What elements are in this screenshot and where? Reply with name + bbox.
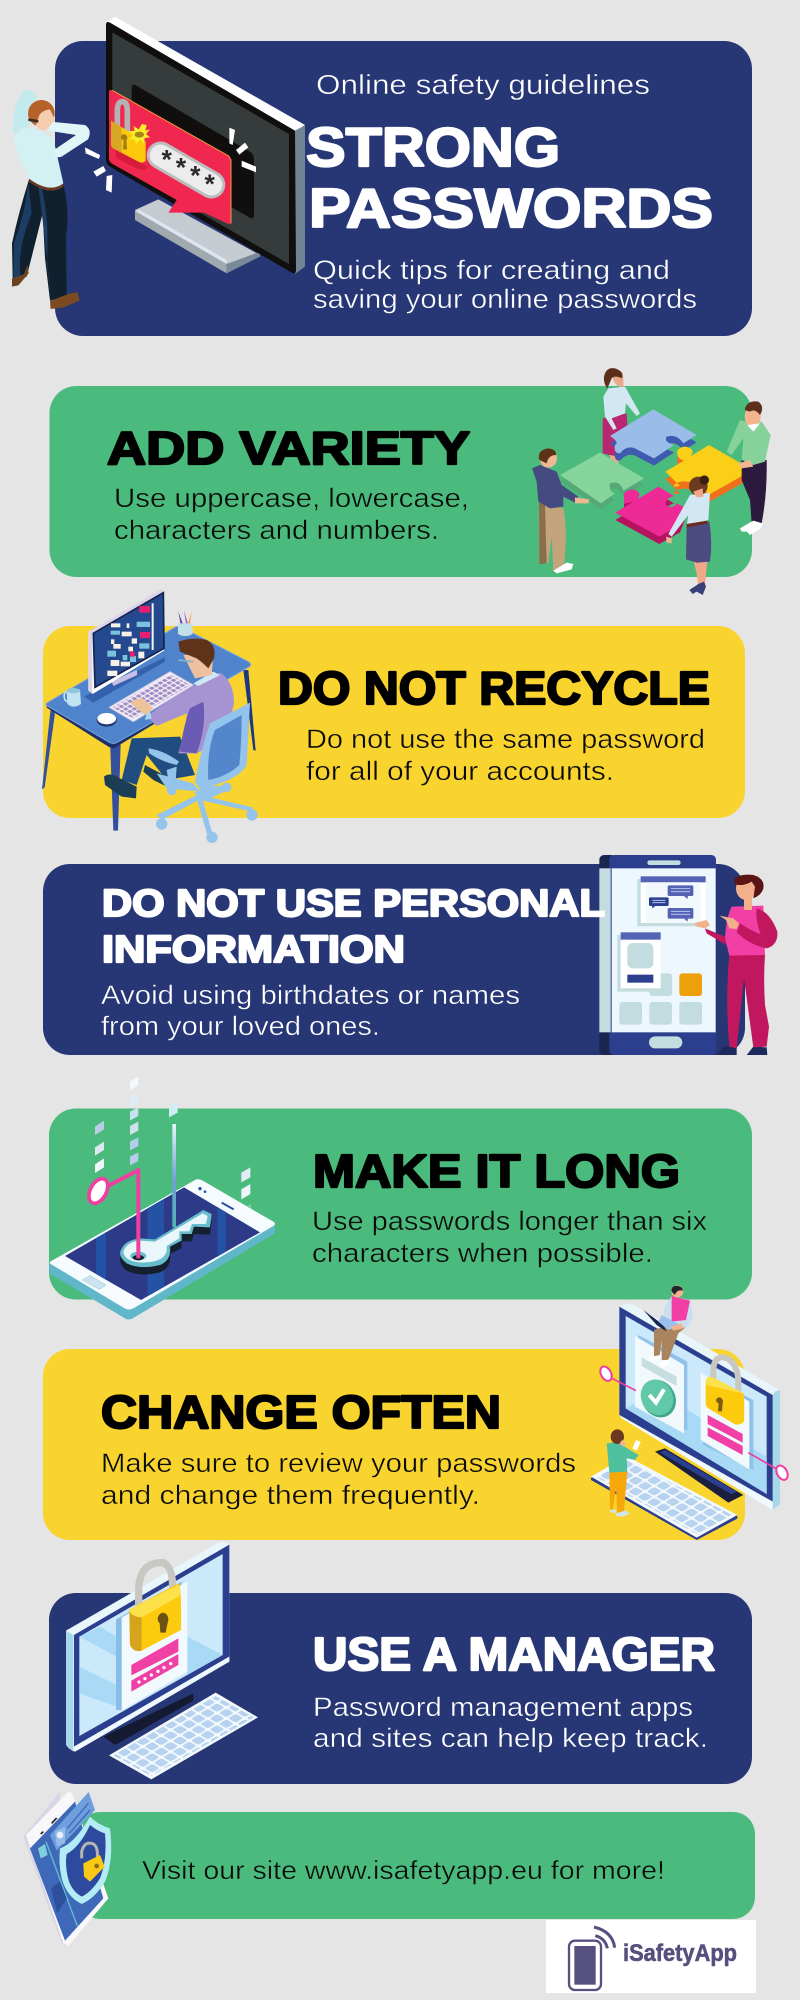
panel: make it long bbox=[49, 1077, 752, 1319]
panel background bbox=[78, 1812, 755, 1919]
icon: phone with signal bbox=[569, 1927, 615, 1990]
icon: floating data squares bbox=[95, 1077, 250, 1220]
icon: red password alert bbox=[109, 90, 231, 224]
heading: MAKE IT LONG bbox=[313, 1145, 680, 1197]
icon: smartphone bbox=[49, 1170, 275, 1319]
illustration: man at desk bbox=[42, 589, 258, 843]
panel: change often bbox=[43, 1285, 790, 1540]
panel: do not recycle bbox=[42, 589, 745, 843]
icon: standing man bbox=[607, 1429, 641, 1517]
icon: presenter bbox=[694, 875, 777, 1055]
hero background bbox=[55, 41, 752, 336]
icon: app window bbox=[617, 932, 661, 992]
panel background bbox=[43, 1349, 745, 1540]
icon: office chair bbox=[148, 703, 258, 843]
icon: profile card bbox=[50, 1792, 95, 1851]
heading: INFORMATION bbox=[102, 929, 405, 971]
icon: woman bottom bbox=[666, 475, 711, 595]
icon: impact marks bbox=[85, 128, 256, 193]
icon: red password alert: * bbox=[204, 169, 215, 199]
icon: pink key ring line bbox=[85, 1170, 138, 1258]
panel: do not use personal information bbox=[43, 855, 777, 1055]
title: STRONG bbox=[306, 116, 560, 178]
panel background bbox=[50, 386, 752, 577]
title bbox=[306, 116, 713, 239]
icon: mug bbox=[64, 688, 81, 707]
heading: CHANGE OFTEN bbox=[101, 1386, 501, 1438]
logo: iSafetyApp bbox=[546, 1920, 756, 1993]
body text: Make sure to review your passwords bbox=[101, 1448, 576, 1478]
heading: DO NOT RECYCLE bbox=[278, 662, 710, 714]
body text: and sites can help keep track. bbox=[313, 1723, 708, 1753]
icon: man right bbox=[727, 401, 771, 535]
icon: large monitor bbox=[619, 1304, 780, 1510]
panel background bbox=[43, 864, 745, 1055]
icon: key bbox=[120, 1210, 212, 1274]
icon: chat window bbox=[637, 876, 706, 926]
illustration: key on phone bbox=[49, 1077, 275, 1319]
subtitle: Quick tips for creating and bbox=[313, 255, 670, 285]
body text: characters when possible. bbox=[312, 1238, 653, 1268]
body text: Avoid using birthdates or names bbox=[101, 980, 520, 1010]
body text: Password management apps bbox=[313, 1692, 693, 1722]
eyebrow text: Online safety guidelines bbox=[316, 69, 650, 100]
icon: puzzle pieces bbox=[560, 409, 753, 544]
title: PASSWORDS bbox=[309, 177, 713, 239]
icon: keyboard bbox=[591, 1456, 737, 1540]
icon: pink pointers bbox=[598, 1365, 790, 1482]
icon: frustrated man bbox=[12, 90, 90, 309]
body text bbox=[313, 1692, 708, 1753]
body text: characters and numbers. bbox=[114, 515, 439, 545]
panel: add variety bbox=[50, 368, 771, 595]
panel background bbox=[49, 1593, 752, 1784]
icon: shield with padlock bbox=[59, 1817, 111, 1904]
body text: for all of your accounts. bbox=[306, 756, 614, 786]
icon: woman top bbox=[603, 368, 640, 473]
icon: light beam bbox=[172, 1124, 176, 1227]
body text bbox=[114, 483, 469, 545]
logo background bbox=[546, 1920, 756, 1993]
body text: Use uppercase, lowercase, bbox=[114, 483, 469, 513]
heading: ADD VARIETY bbox=[107, 422, 470, 474]
icon: red password alert: * bbox=[161, 145, 172, 175]
icon: login document with lock bbox=[701, 1357, 753, 1470]
illustration: frustrated man at monitor bbox=[12, 17, 305, 309]
subtitle bbox=[313, 255, 697, 314]
illustration: person with phone bbox=[599, 855, 777, 1055]
icon: phone bbox=[23, 1792, 108, 1947]
heading: USE A MANAGER bbox=[313, 1628, 715, 1680]
body text bbox=[312, 1206, 707, 1268]
illustration: phone with shield bbox=[23, 1792, 111, 1947]
icon: desktop monitor bbox=[84, 589, 165, 703]
body text: from your loved ones. bbox=[101, 1011, 380, 1041]
panel background bbox=[49, 1108, 752, 1300]
logo wordmark: iSafetyApp bbox=[623, 1940, 737, 1967]
heading bbox=[102, 883, 605, 971]
icon: login sheet bbox=[116, 1582, 187, 1711]
icon: seated person with laptop bbox=[643, 1285, 693, 1367]
icon: monitor stand bbox=[135, 199, 260, 273]
illustration: team assembling puzzle bbox=[532, 368, 771, 595]
panel background bbox=[43, 626, 745, 818]
call to action text: Visit our site www.isafetyapp.eu for more! bbox=[142, 1855, 665, 1885]
icon: man seated bbox=[104, 639, 234, 798]
icon: keyboard and mouse bbox=[97, 672, 193, 727]
illustration: monitor with password lock bbox=[591, 1285, 790, 1540]
icon: monitor bbox=[66, 1541, 229, 1752]
panel: visit site footer bbox=[23, 1792, 755, 1947]
body text: Use passwords longer than six bbox=[312, 1206, 707, 1236]
body text: and change them frequently. bbox=[101, 1480, 480, 1510]
body text bbox=[101, 980, 520, 1041]
body text bbox=[101, 1448, 576, 1510]
panel: use a manager bbox=[49, 1541, 752, 1784]
body text: Do not use the same password bbox=[306, 724, 705, 754]
icon: red password alert: * bbox=[190, 161, 201, 191]
icon: padlock bbox=[129, 1563, 181, 1651]
subtitle: saving your online passwords bbox=[313, 284, 697, 314]
icon: monitor bbox=[106, 17, 305, 274]
icon: desk bbox=[42, 626, 256, 831]
heading: DO NOT USE PERSONAL bbox=[102, 883, 605, 925]
icon: monitor stand bbox=[103, 1693, 193, 1745]
body text bbox=[306, 724, 705, 786]
illustration: monitor with padlock bbox=[66, 1541, 258, 1779]
icon: man left bbox=[532, 448, 589, 573]
icon: check document bbox=[635, 1335, 687, 1433]
icon: pencil cup bbox=[178, 610, 193, 636]
icon: phone bbox=[599, 855, 716, 1055]
panel: hero header bbox=[12, 17, 752, 336]
icon: red password alert: * bbox=[176, 153, 187, 183]
icon: keyboard bbox=[109, 1693, 258, 1779]
